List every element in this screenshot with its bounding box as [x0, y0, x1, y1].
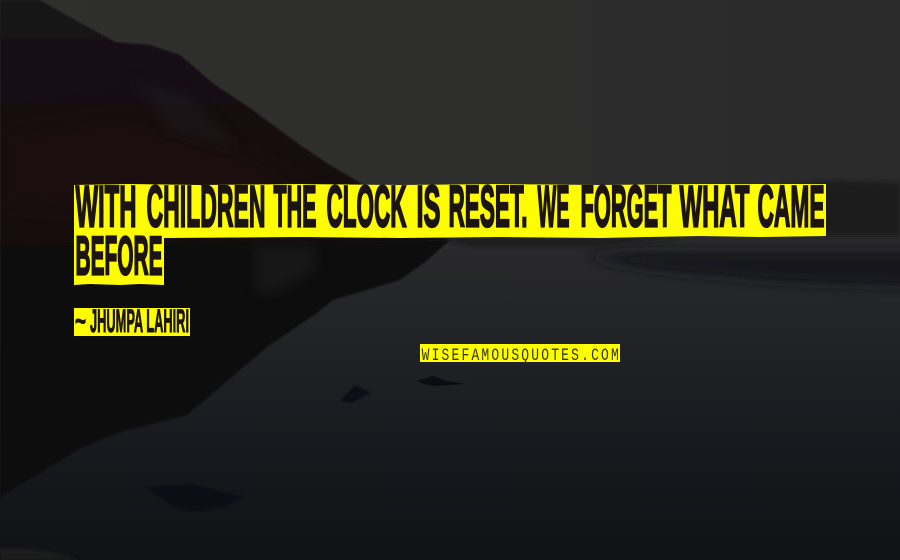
quote banner: FORGET — [580, 174, 672, 240]
quote banner: WE — [538, 174, 570, 240]
icon: rock in water, right — [417, 376, 466, 386]
icon: rock in water, lower left — [145, 484, 245, 512]
quote banner — [74, 174, 826, 286]
icon: rock in water, middle — [340, 385, 371, 403]
quote banner: IS — [416, 174, 440, 240]
quote banner: THE — [274, 174, 316, 240]
text: JHUMPA LAHIRI — [90, 303, 189, 339]
author tilde: ~ — [75, 306, 86, 338]
site logo — [420, 344, 620, 366]
author attribution — [74, 303, 190, 339]
quote line 1 highlight — [74, 184, 826, 238]
quote banner: WITH — [76, 174, 136, 240]
quote banner: BEFORE — [76, 224, 162, 286]
quote banner: CLOCK — [326, 174, 407, 240]
logo highlight — [420, 344, 620, 362]
logo text: WISEFAMOUSQUOTES.COM — [422, 345, 619, 366]
quote banner: RESET. — [448, 174, 528, 240]
quote line 2 highlight — [74, 237, 164, 285]
quote banner: WHAT — [680, 174, 750, 240]
author highlight — [74, 308, 190, 336]
quote banner: CHILDREN — [146, 174, 266, 240]
